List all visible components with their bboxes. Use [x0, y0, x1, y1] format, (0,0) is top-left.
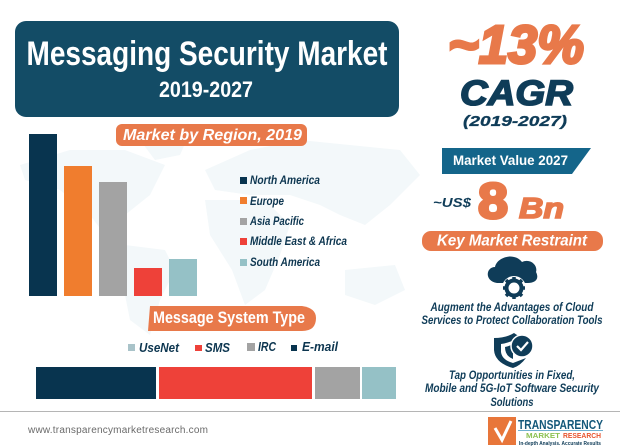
footer url: www.transparencymarketresearch.com	[27, 425, 208, 436]
heading: key market restraint: Key Market Restraint	[437, 232, 588, 250]
heading: market by region: Market by Region, 2019	[123, 127, 302, 144]
bar chart: market by region	[29, 134, 197, 296]
legend: regions: Middle East & Africa	[250, 236, 348, 248]
CAGR value: ~13%	[448, 15, 584, 75]
legend: regions: North America	[250, 175, 321, 187]
legend: regions: Asia Pacific	[249, 216, 304, 228]
CAGR period: (2019-2027)	[463, 114, 567, 130]
text: 5G-IoT restraint: Solutions	[490, 397, 534, 409]
stacked bar: message system type	[36, 367, 396, 399]
legend: regions: Europe	[250, 196, 285, 208]
legend: message system types: IRC	[258, 339, 276, 354]
market value figure: Bn	[519, 193, 564, 225]
world map background	[20, 132, 420, 335]
text: cloud restraint	[422, 302, 602, 327]
icon: shield with check	[494, 333, 533, 368]
text: 5G-IoT restraint	[425, 370, 600, 409]
text: 5G-IoT restraint: Tap Opportunities in Fixed,	[449, 370, 575, 382]
text: cloud restraint: Augment the Advantages of Cloud	[430, 302, 594, 314]
logo: RESEARCH	[563, 431, 601, 440]
title banner: Messaging Security Market	[26, 35, 388, 73]
logo: In-depth Analysis. Accurate Results	[519, 441, 601, 447]
text: 5G-IoT restraint: Mobile and 5G-IoT Software Security	[425, 383, 600, 395]
footer divider	[0, 411, 620, 412]
legend: message system types: UseNet	[139, 340, 180, 355]
icon: cloud with gear	[488, 257, 537, 300]
title banner	[15, 21, 399, 117]
market value ribbon: Market Value 2027	[453, 152, 568, 168]
title banner: 2019-2027	[159, 77, 253, 102]
CAGR label: CAGR	[460, 74, 574, 113]
market value ribbon	[442, 148, 591, 174]
legend: message system types	[128, 339, 338, 355]
legend: regions: South America	[250, 257, 321, 269]
legend: message system types: E-mail	[302, 339, 338, 354]
market value figure: ~US$	[433, 195, 472, 210]
heading: message system type: Message System Type	[153, 308, 305, 327]
market value figure	[433, 173, 564, 229]
legend: message system types: SMS	[205, 340, 230, 355]
heading: message system type	[148, 306, 316, 331]
legend: regions	[240, 175, 348, 269]
market value figure: 8	[478, 173, 508, 229]
logo	[488, 417, 603, 447]
logo: MARKET	[526, 431, 560, 440]
